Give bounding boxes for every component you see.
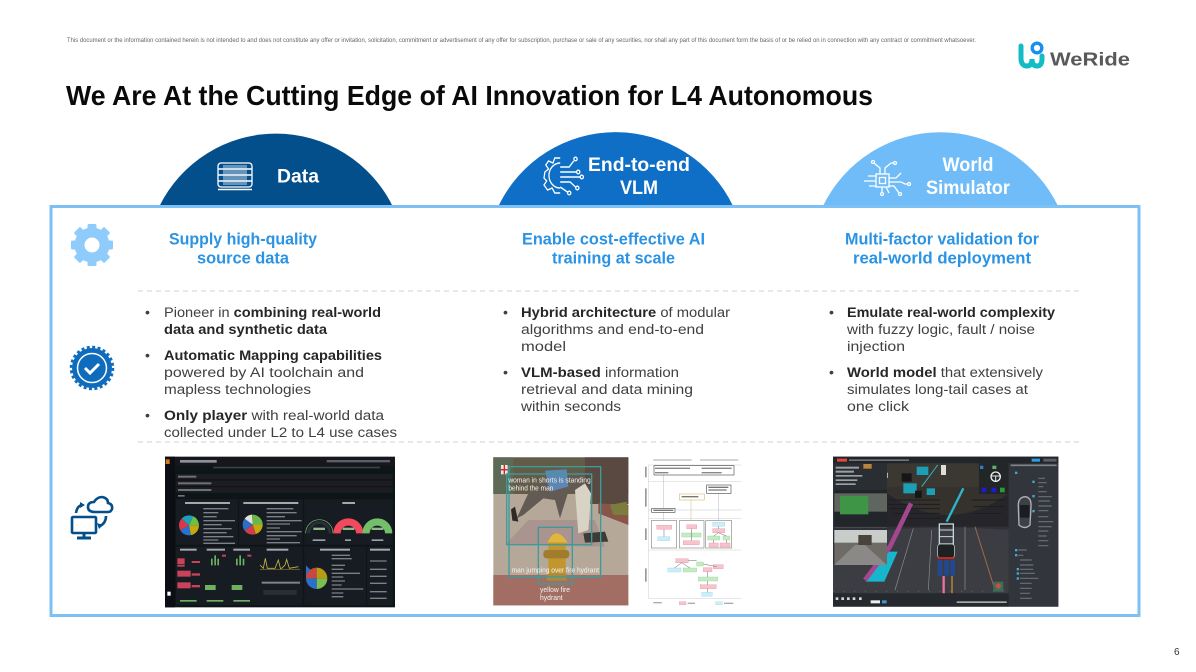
column 2 heading: Enable cost-effective AI [522, 230, 705, 248]
timeline [833, 593, 1009, 607]
column 1 heading: Supply high-quality [169, 230, 318, 248]
column 2 heading [522, 230, 705, 268]
column 2 bullets [503, 305, 730, 415]
pie 1 [184, 520, 194, 530]
column 3 bullets: injection [847, 339, 905, 355]
column 2 bullets: within seconds [520, 399, 621, 415]
HUD [979, 463, 1009, 494]
column 2 bullets: VLM-based information [521, 365, 679, 381]
column 3 bullets: one click [847, 399, 910, 415]
icon: gear circuit [544, 157, 583, 195]
ego car [938, 524, 955, 593]
camera views [833, 463, 887, 490]
column 3 heading: real-world deployment [853, 250, 1032, 268]
column 1 bullets: Only player with real-world data [164, 408, 384, 424]
pie 3 [311, 573, 322, 584]
dome: World Simulator: World [942, 155, 994, 176]
column 3 bullets: simulates long-tail cases at [847, 382, 1028, 398]
icon: cloud and monitor sync [72, 497, 112, 538]
column 3 bullets: Emulate real-world complexity [847, 305, 1055, 321]
pie 2 [248, 520, 258, 530]
column 1 bullets: Automatic Mapping capabilities [164, 348, 382, 364]
column 1 heading: source data [197, 250, 290, 268]
column 3 heading: Multi-factor validation for [845, 230, 1040, 248]
dome: Data: Data [277, 166, 319, 188]
logo: WeRide [1021, 43, 1130, 70]
column 1 bullets: Pioneer in combining real-world [164, 305, 381, 321]
screenshot: VLM photo annotation: woman in shorts is standing [507, 478, 591, 485]
column 2 bullets: • [503, 305, 508, 321]
column 2 bullets: • [503, 365, 508, 381]
column 2 bullets: Hybrid architecture of modular [521, 305, 730, 321]
screenshot: data dashboard [165, 457, 395, 607]
column 3 bullets: • [829, 365, 834, 381]
figure: man [517, 470, 585, 518]
right sidebar [1009, 463, 1058, 607]
column 1 bullets [145, 305, 397, 441]
icon: chip circuit [864, 160, 910, 196]
screenshot: VLM photo annotation: hydrant [540, 595, 563, 602]
screenshot: VLM photo annotation: behind the man [508, 486, 553, 493]
bars [177, 555, 251, 588]
column 1 bullets: collected under L2 to L4 use cases [164, 425, 397, 441]
VLM flow diagram [643, 457, 743, 607]
column 3 bullets: with fuzzy logic, fault / noise [846, 322, 1035, 338]
column 3 bullets: • [829, 305, 834, 321]
gauges [306, 520, 333, 533]
column 1 bullets: • [145, 305, 150, 321]
screenshot: VLM photo annotation: man jumping over fire hydrant [512, 568, 599, 575]
hydrant [547, 533, 568, 543]
page number: 6 [1174, 647, 1180, 658]
screenshot: VLM photo annotation: yellow fire [540, 587, 570, 594]
column 1 bullets: • [145, 348, 150, 364]
column 1 bullets: data and synthetic data [164, 322, 327, 338]
column 3 heading [845, 230, 1040, 268]
column 1 bullets: • [145, 408, 150, 424]
column 1 heading [169, 230, 318, 268]
title: We Are At the Cutting Edge of AI Innovation for L4 Autonomous [66, 80, 873, 111]
column 3 bullets [829, 305, 1055, 415]
dome: End-to-end VLM: VLM [620, 178, 658, 199]
icon: gear [71, 224, 113, 266]
dome: End-to-end VLM: End-to-end [588, 155, 690, 176]
column 1 bullets: powered by AI toolchain and [164, 365, 364, 381]
column 2 heading: training at scale [552, 250, 675, 268]
screenshot: world simulator [833, 457, 1058, 607]
column 2 bullets: model [521, 339, 566, 355]
logo: WeRide: WeRide [1050, 48, 1130, 70]
screenshot: VLM photo annotation [493, 457, 743, 607]
legends [203, 509, 387, 598]
dome: World Simulator: Simulator [926, 178, 1011, 199]
dome: World Simulator [823, 132, 1058, 206]
column 2 bullets: retrieval and data mining [521, 382, 693, 398]
column 1 bullets: mapless technologies [164, 382, 311, 398]
dome: Data [160, 134, 392, 206]
icon: data server [218, 163, 252, 190]
dome: End-to-end VLM [498, 132, 733, 206]
scene [887, 463, 1009, 527]
dashed dividers [138, 291, 1083, 442]
disclaimer: This document or the information contained herein is not intended to and does not constitute any offer or invitation, solicitation, commitment or advertisement of any offer for subscription, purchase or sale of any securities, nor shall any part of this document form the basis of or be relied on in connection with any contract or commitment whatsoever. [67, 38, 976, 44]
icon: verified badge [71, 347, 113, 389]
panel: main frame [51, 206, 1139, 616]
column 2 bullets: algorithms and end-to-end [521, 322, 704, 338]
column 3 bullets: World model that extensively [847, 365, 1044, 381]
